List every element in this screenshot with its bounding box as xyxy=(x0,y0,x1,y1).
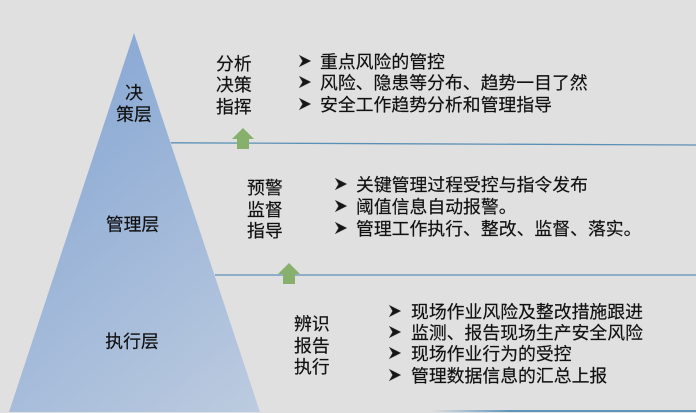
label: decision layer: 决 xyxy=(125,83,143,103)
text block: management roles: 监督 xyxy=(247,200,283,220)
list: decision items: 重点风险的管控 xyxy=(320,52,445,72)
text block: management roles: 指导 xyxy=(247,221,283,241)
list: management items: 管理工作执行、整改、监督、落实。 xyxy=(356,219,642,239)
list: decision items: 安全工作趋势分析和管理指导 xyxy=(320,95,552,115)
label: management layer: 管理层 xyxy=(106,214,159,234)
bottom divider line xyxy=(430,410,696,412)
text block: execution roles xyxy=(294,314,330,377)
pyramid xyxy=(9,33,260,412)
text block: execution roles: 辨识 xyxy=(294,314,330,334)
list: decision items xyxy=(299,52,588,115)
text block: decision roles: 决策 xyxy=(216,75,252,95)
text block: management roles: 预警 xyxy=(247,178,283,198)
list: execution items: 管理数据信息的汇总上报 xyxy=(411,366,607,386)
arrow: up to management layer xyxy=(278,263,300,284)
list: execution items xyxy=(389,302,643,386)
text block: management roles xyxy=(247,178,283,241)
text block: decision roles: 分析 xyxy=(216,54,252,74)
list: execution items: 监测、报告现场生产安全风险 xyxy=(411,323,643,343)
list: execution items: 现场作业行为的受控 xyxy=(411,344,572,364)
list: execution items: 现场作业风险及整改措施跟进 xyxy=(411,302,643,322)
text block: execution roles: 报告 xyxy=(294,336,330,356)
label: decision layer xyxy=(116,83,152,124)
label: execution layer: 执行层 xyxy=(105,332,159,352)
text block: decision roles xyxy=(216,54,252,117)
text block: execution roles: 执行 xyxy=(294,357,330,377)
list: management items: 阈值信息自动报警。 xyxy=(356,197,517,217)
divider line: decision and management xyxy=(171,143,696,145)
list: management items: 关键管理过程受控与指令发布 xyxy=(356,175,588,195)
label: decision layer: 策层 xyxy=(116,104,152,124)
list: decision items: 风险、隐患等分布、趋势一目了然 xyxy=(320,73,588,93)
list: management items xyxy=(335,175,642,239)
text block: decision roles: 指挥 xyxy=(216,97,252,117)
arrow: up to decision layer xyxy=(232,128,254,149)
divider line: management and execution xyxy=(215,274,696,276)
